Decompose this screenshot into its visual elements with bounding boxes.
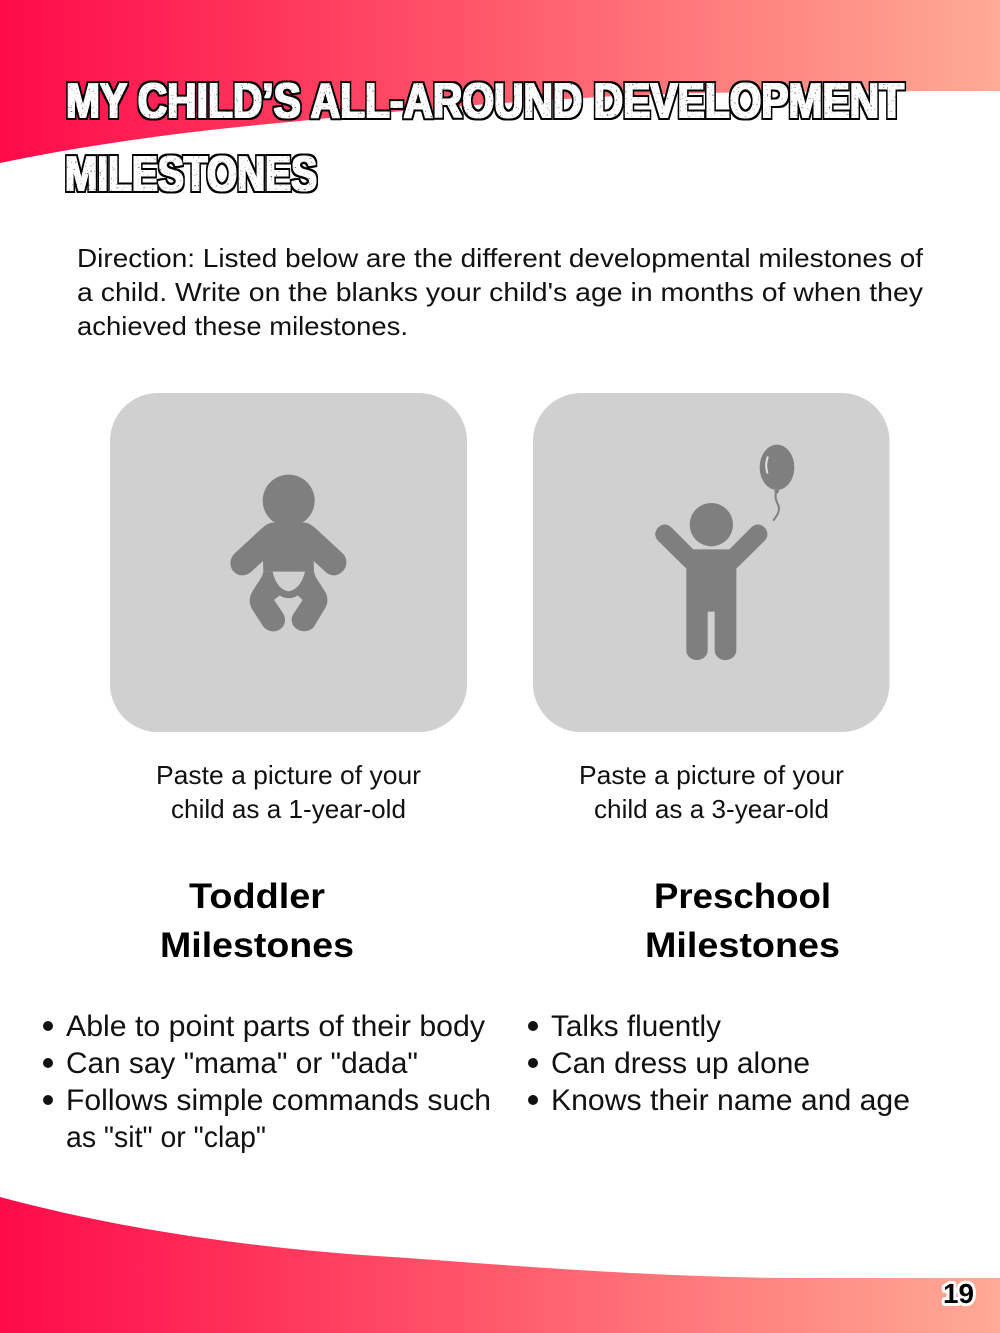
top gradient banner <box>0 0 1000 163</box>
list: toddler milestones: Follows simple commands such <box>66 1084 491 1117</box>
directions text block <box>77 243 924 341</box>
heading: toddler milestones: Toddler <box>189 877 325 916</box>
title: MILESTONES <box>65 148 317 202</box>
directions text block: achieved these milestones. <box>77 311 408 341</box>
list: toddler milestones: Able to point parts of their body <box>66 1010 485 1043</box>
bottom gradient banner <box>0 1197 1000 1333</box>
panel: 3-year-old photo placeholder <box>533 393 890 732</box>
icon: child with balloon <box>655 445 794 660</box>
directions text block: a child. Write on the blanks your child's age in months of when they <box>77 277 923 307</box>
caption: 3-year-old: child as a 3-year-old <box>594 794 829 824</box>
list: preschool milestones: Knows their name and age <box>551 1084 910 1117</box>
panel: 1-year-old photo placeholder <box>110 393 467 732</box>
list: toddler milestones <box>43 1010 491 1154</box>
caption: 3-year-old: Paste a picture of your <box>579 760 844 790</box>
list: preschool milestones: Talks fluently <box>551 1010 721 1043</box>
heading: preschool milestones: Preschool <box>654 877 831 916</box>
heading: toddler milestones <box>160 877 354 965</box>
title <box>65 74 904 202</box>
list: toddler milestones: Can say "mama" or "dada" <box>66 1047 418 1080</box>
icon: baby <box>230 475 346 631</box>
caption: 3-year-old <box>579 760 844 824</box>
caption: 1-year-old: child as a 1-year-old <box>171 794 406 824</box>
caption: 1-year-old <box>156 760 421 824</box>
list: preschool milestones: Can dress up alone <box>551 1047 810 1080</box>
heading: preschool milestones: Milestones <box>645 926 840 965</box>
heading: preschool milestones <box>645 877 840 965</box>
list: toddler milestones: as "sit" or "clap" <box>66 1121 266 1154</box>
caption: 1-year-old: Paste a picture of your <box>156 760 421 790</box>
page number: 19 <box>943 1278 974 1309</box>
list: preschool milestones <box>528 1010 910 1117</box>
heading: toddler milestones: Milestones <box>160 926 354 965</box>
directions text block: Direction: Listed below are the different developmental milestones of <box>77 243 924 273</box>
